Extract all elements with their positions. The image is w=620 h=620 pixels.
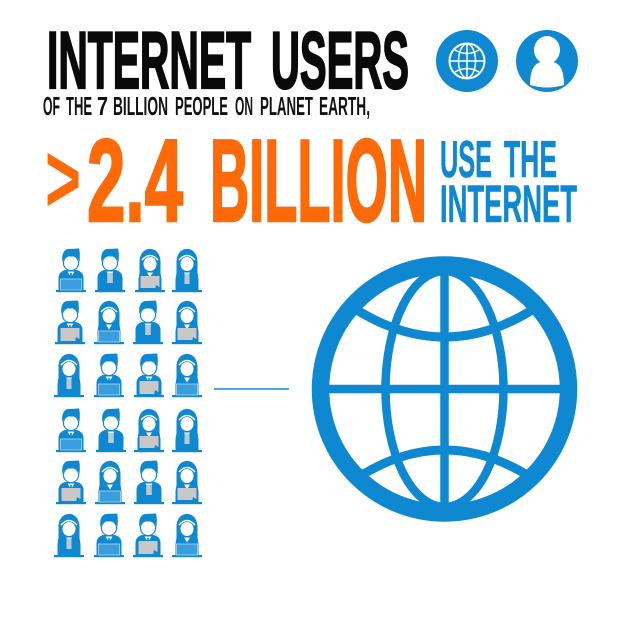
headline figure: 2.4 xyxy=(87,116,183,246)
subtitle xyxy=(43,91,370,121)
icon: person badge xyxy=(516,30,578,92)
person xyxy=(134,460,164,504)
person xyxy=(54,514,84,557)
icon: globe badge xyxy=(436,30,498,92)
headline figure: > xyxy=(45,123,81,233)
title: INTERNET xyxy=(47,16,251,106)
person xyxy=(133,300,163,344)
person xyxy=(134,409,164,452)
subtitle: EARTH, xyxy=(319,91,370,121)
text: use the internet: THE xyxy=(504,131,557,189)
text: USERS xyxy=(271,16,409,106)
person xyxy=(94,514,124,557)
subtitle: PLANET xyxy=(260,91,313,121)
subtitle: BILLION xyxy=(113,91,168,121)
subtitle: OF xyxy=(43,91,60,121)
person xyxy=(134,354,164,397)
person xyxy=(172,461,202,504)
person xyxy=(55,300,85,344)
person xyxy=(56,248,86,292)
person xyxy=(172,249,202,292)
text: use the internet xyxy=(440,131,577,234)
person xyxy=(172,354,202,397)
subtitle: PEOPLE xyxy=(175,91,228,121)
person xyxy=(172,409,202,452)
headline figure xyxy=(45,116,427,246)
subtitle: 7 xyxy=(97,91,108,121)
person xyxy=(96,408,126,452)
text: use the internet: USE xyxy=(440,131,492,189)
person xyxy=(95,248,125,292)
person xyxy=(56,408,86,452)
subtitle: ON xyxy=(235,91,253,121)
icon: large globe xyxy=(320,265,568,513)
people grid xyxy=(54,248,202,557)
person xyxy=(56,460,86,504)
connector line xyxy=(214,388,289,390)
person xyxy=(172,301,202,344)
person xyxy=(133,514,163,557)
person xyxy=(94,301,124,344)
person xyxy=(94,354,124,397)
person xyxy=(95,461,125,504)
subtitle: THE xyxy=(66,91,92,121)
person xyxy=(54,354,84,397)
person xyxy=(172,514,202,557)
person xyxy=(135,249,165,292)
